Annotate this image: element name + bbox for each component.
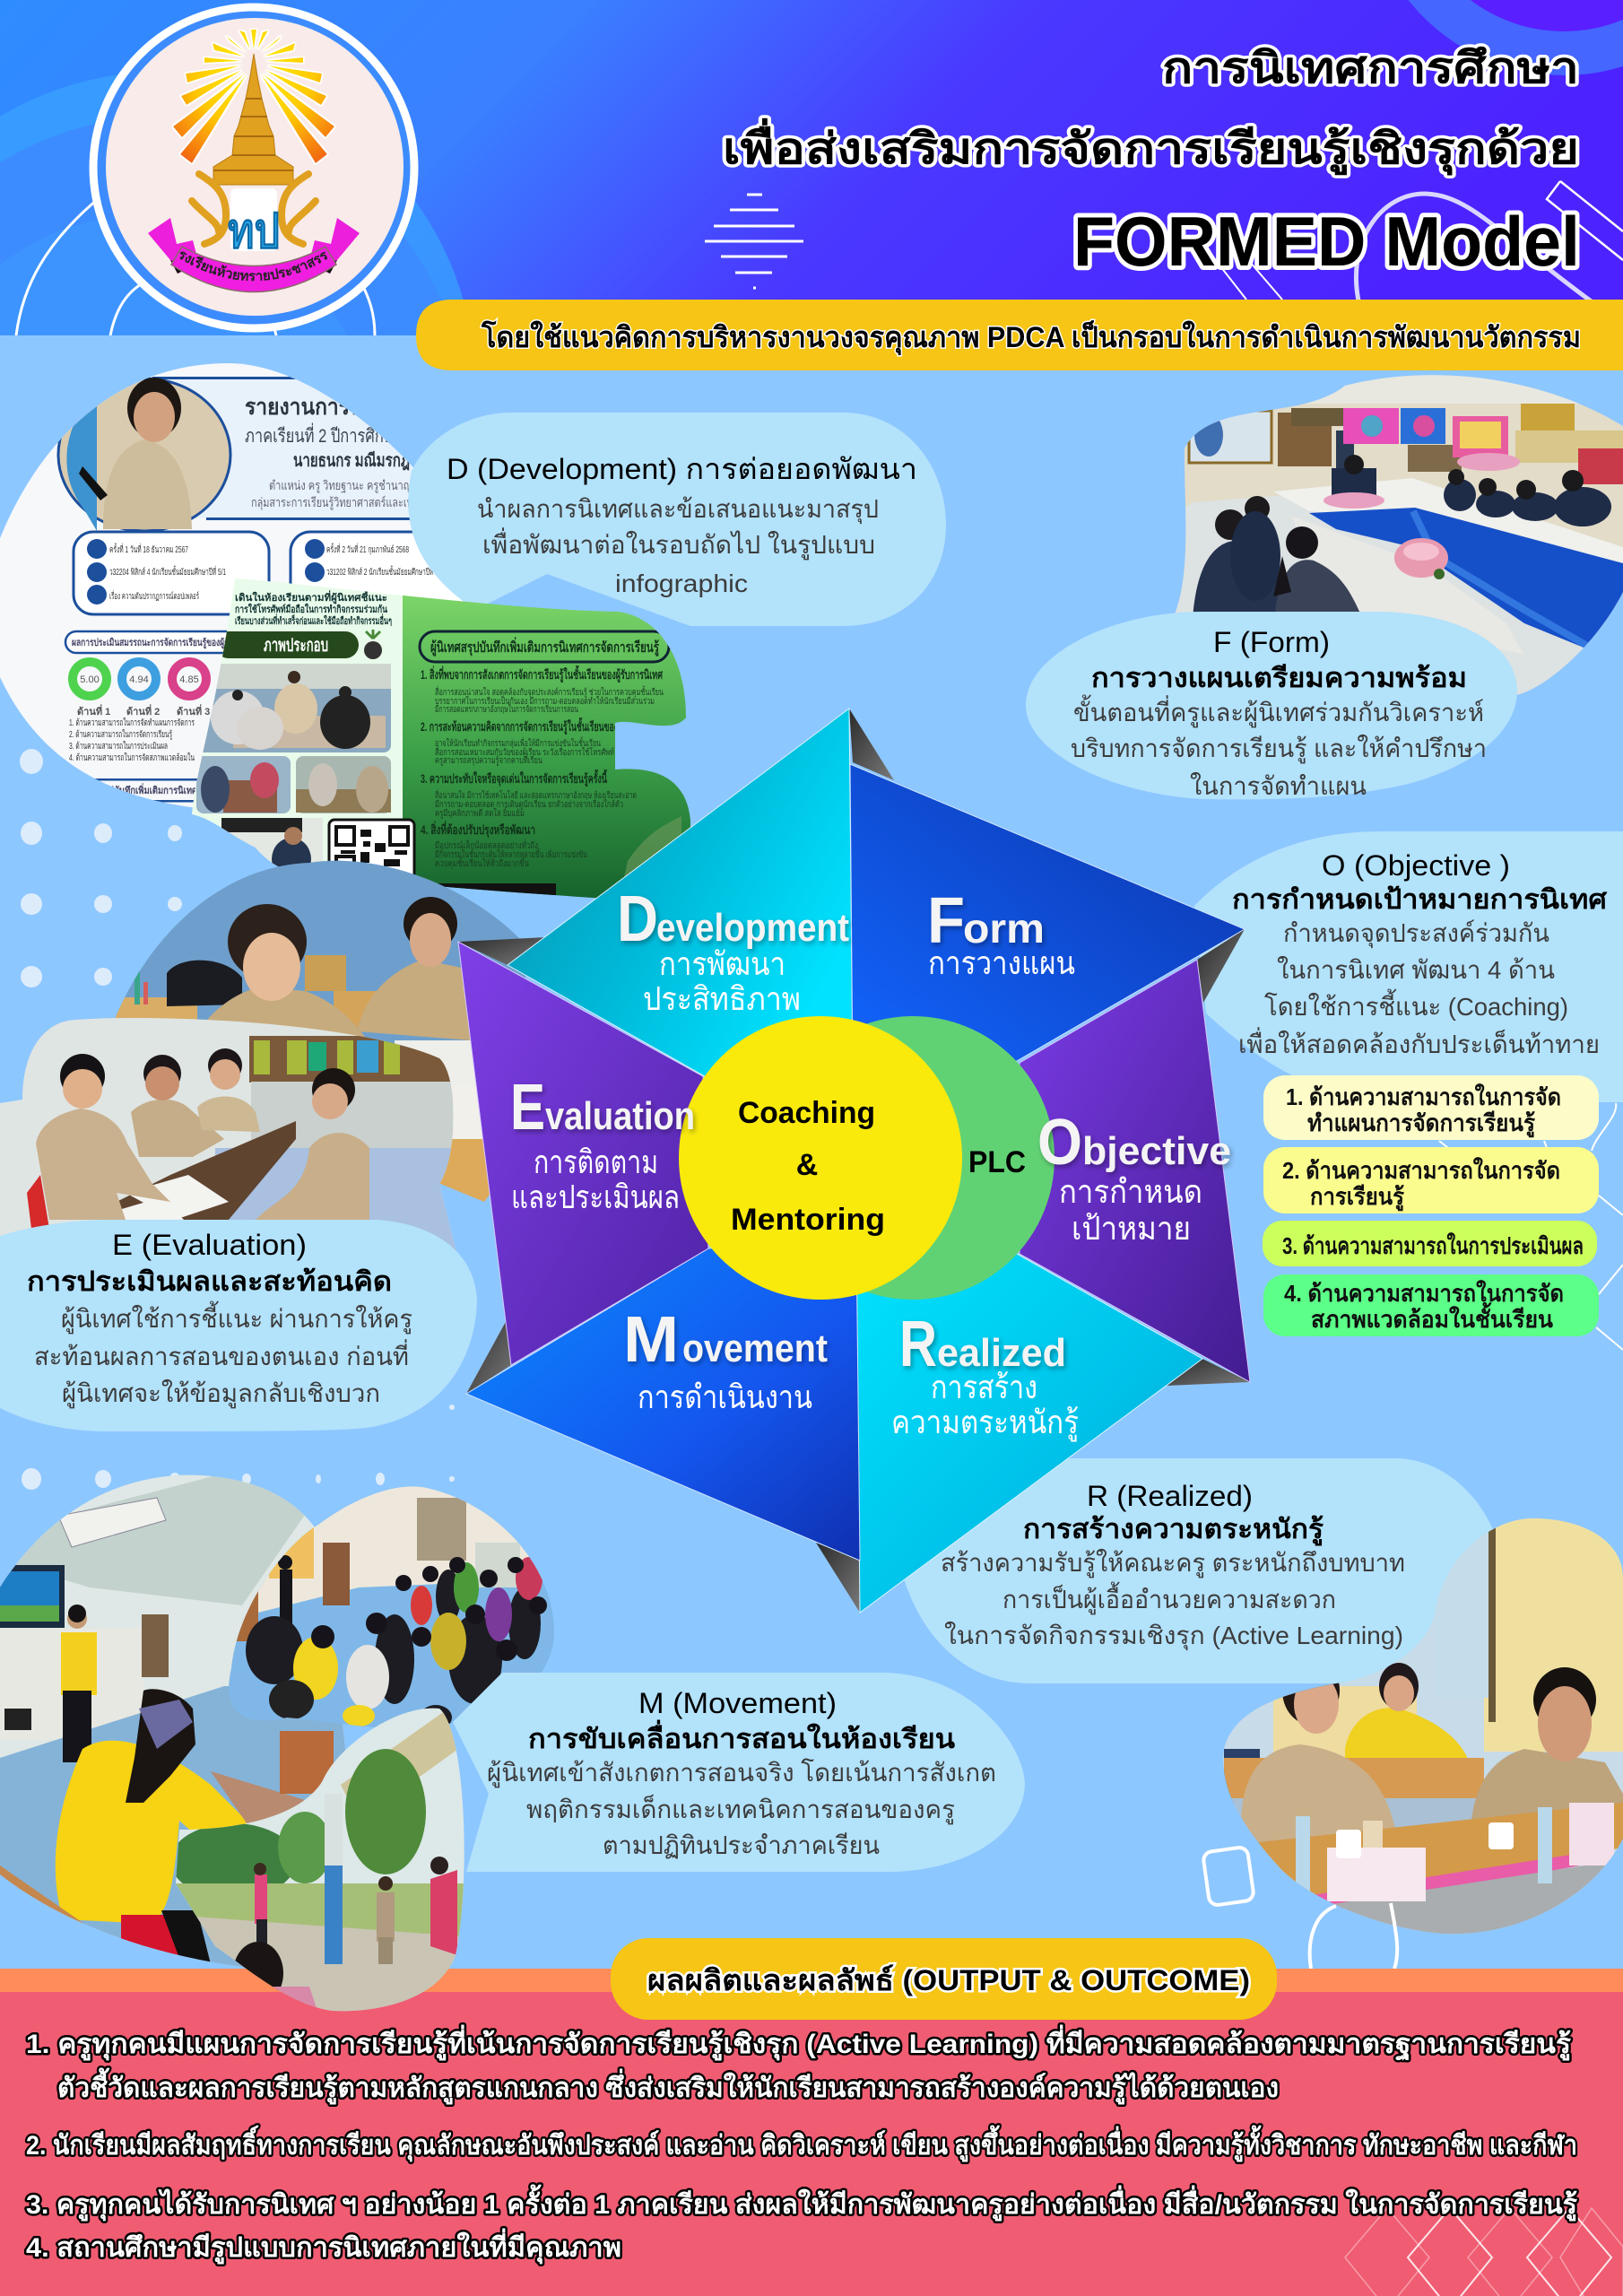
photo bottom overlap (outdoor activity continuation) (170, 1942, 475, 2018)
photo: supervision report document: ครั้งที่ 1 วันที่ 18 ธันวาคม 2567 (109, 543, 188, 555)
photo: supervision form document (green): บรรยากาศในการเรียนเป็นกันเอง มีการถาม-ตอบตลอดทำให้นักเรียนมีส่วนร่วม (435, 694, 655, 707)
label: Form: F (927, 885, 965, 957)
segment: Realized (856, 1238, 1202, 1613)
panel: O Objective: เพื่อให้สอดคล้องกับประเด็นท้าทาย (1238, 1027, 1600, 1058)
label: PLC: PLC (968, 1145, 1026, 1179)
panel: O Objective (1194, 831, 1623, 1102)
label: Form (927, 885, 1075, 981)
photo: supervision form document (green): มีอุปกรณ์เล็กน้อยตลอดอย่างทั่วถึง (435, 839, 538, 851)
photo: supervision report document: ด้านที่ 3 (177, 704, 210, 718)
label: Coaching and Mentoring: Coaching (738, 1096, 875, 1130)
photo: supervision form document (green): มีการถาม-ตอบตลอด การเดินดูนักเรียน ยกตัวอย่างจากเรื่องใกล้ตัว (435, 797, 623, 810)
panel: E Evaluation: ผู้นิเทศจะให้ข้อมูลกลับเชิงบวก (62, 1378, 380, 1409)
panel: D Development (408, 413, 946, 626)
label: Development: การพัฒนา (659, 945, 785, 982)
hexagram diagram: FORMED model (458, 709, 1250, 1613)
panel: R Realized: การสร้างความตระหนักรู้ (1023, 1515, 1324, 1546)
photo: students on floor (229, 1486, 554, 1727)
photo: supervision form document (green): เรียนบางส่วนที่ทำเสร็จก่อนและใช้มือถือทำกิจกรรมอื่นๆ (235, 613, 392, 627)
photo: supervision form document (green): สื่อการสอนน่าสนใจ สอดคล้องกับจุดประสงค์การเรียนรู้ ช่วยในการควบคุมชั้นเรียน (435, 685, 664, 698)
label: Form: การวางแผน (928, 944, 1075, 981)
photo: supervision form document (green): ควบคุมชั้นเรียนให้ทั่วถึงมากขึ้น (435, 857, 529, 869)
panel: O Objective: กำหนดจุดประสงค์ร่วมกัน (1283, 919, 1549, 949)
label: Development: ประสิทธิภาพ (643, 980, 801, 1017)
label: Evaluation: E (510, 1072, 545, 1144)
outcome list: 3. ครูทุกคนได้รับการนิเทศ ฯ อย่างน้อย 1 ครั้งต่อ 1 ภาคเรียน ส่งผลให้มีการพัฒนาครูอย่างต่อเนื่อง มีสื่อ/นวัตกรรม ในการจัดการเรียนรู้ (26, 2184, 1577, 2222)
label: Objective (1037, 1107, 1231, 1247)
photo: supervision report document: ตำแหน่ง ครู วิทยฐานะ ครูชำนาญการ (269, 478, 429, 493)
objective item 1: ทำแผนการจัดการเรียนรู้ (1307, 1109, 1535, 1138)
label: Development (617, 883, 849, 1017)
objective item 4 (1263, 1274, 1599, 1336)
panel: D Development: นำผลการนิเทศและข้อเสนอแนะมาสรุป (477, 495, 879, 525)
photo: supervision form document (green): 4. สิ่งที่ต้องปรับปรุงหรือพัฒนา (421, 821, 535, 838)
photo: supervision report document: ว32204 ฟิสิกส์ 4 นักเรียนชั้นมัธยมศึกษาปีที่ 5/1 (109, 565, 226, 578)
photo: supervision report document: ด้านที่ 2 (126, 704, 160, 718)
panel: F Form: การวางแผนเตรียมความพร้อม (1091, 664, 1467, 693)
segment: Development (508, 709, 853, 1083)
title (723, 45, 1580, 281)
panel: D Development: เพื่อพัฒนาต่อในรอบถัดไป ในรูปแบบ (482, 527, 875, 561)
label: Movement: M (623, 1304, 679, 1376)
subtitle banner (416, 300, 1623, 370)
photo: supervision report document: รายงานการนิเทศ (245, 395, 398, 420)
photo: supervision form document (green): 3. ความประทับใจหรือจุดเด่นในการจัดการเรียนรู้ครั้งนี้ (421, 769, 607, 787)
photo: teachers at desk (evaluation top) (115, 861, 525, 1202)
label: Realized: ealized (937, 1331, 1066, 1375)
panel: M Movement (453, 1673, 1025, 1872)
label: Realized: R (899, 1309, 937, 1380)
decorative dots (20, 749, 455, 1490)
outcome list (26, 2024, 1577, 2265)
photo: supervision form document (green): ครูสามารถสรุปความรู้จากคาบที่เรียน (435, 753, 542, 766)
panel: E Evaluation: การประเมินผลและสะท้อนคิด (27, 1267, 392, 1297)
segment: Evaluation (458, 942, 708, 1365)
photo: supervision report document: เรื่อง ความดันปรากฏการณ์ดอปเพลอร์ (109, 589, 199, 602)
panel: O Objective: ในการนิเทศ พัฒนา 4 ด้าน (1277, 955, 1555, 984)
label: Evaluation (510, 1072, 695, 1215)
label: Evaluation: และประเมินผล (511, 1178, 680, 1215)
title: เพื่อส่งเสริมการจัดการเรียนรู้เชิงรุกด้วย (723, 117, 1579, 176)
output and outcome heading pill (611, 1938, 1277, 2020)
photo: supervision form document (green): ผู้นิเทศสรุปบันทึกเพิ่มเติมการนิเทศการจัดการเรียนรู้ (430, 637, 659, 657)
objective item 4: 4. ด้านความสามารถในการจัด (1284, 1280, 1564, 1307)
panel: E Evaluation: E (Evaluation) (112, 1229, 307, 1261)
panel: R Realized: สร้างความรับรู้ให้คณะครู ตระหนักถึงบทบาท (941, 1548, 1405, 1578)
label: illustration pill (215, 631, 359, 658)
panel: F Form: F (Form) (1213, 626, 1330, 658)
label: Realized: การสร้าง (931, 1369, 1037, 1405)
photo: supervision report document: 1. ด้านความสามารถในการจัดทำแผนการจัดการ (69, 718, 195, 728)
label: Form: orm (963, 905, 1045, 952)
photo: supervision report document: 5.00 (80, 674, 100, 685)
panel: R Realized: การเป็นผู้เอื้ออำนวยความสะดวก (1002, 1581, 1336, 1615)
photo: supervision form document (green): การใช้โทรศัพท์มือถือในการทำกิจกรรมร่วมกัน (235, 603, 387, 615)
segment: Movement (466, 1238, 860, 1561)
outcome list: 1. ครูทุกคนมีแผนการจัดการเรียนรู้ที่เน้นการจัดการเรียนรู้เชิงรุก (Active Learning) ที่มีความสอดคล้องตามมาตรฐานการเรียนรู้ (26, 2024, 1571, 2062)
outcome list: 4. สถานศึกษามีรูปแบบการนิเทศภายในที่มีคุณภาพ (26, 2228, 621, 2265)
photo: supervision form document (green): สื่อการสอนเหมาะสมกับวัยของผู้เรียน ระวังเรื่องการใช้โทรศัพท์ (435, 745, 614, 758)
photo: supervision report document: 4.94 (129, 674, 149, 685)
photo: supervision report document: 4.85 (179, 674, 199, 685)
output and outcome heading pill: ผลผลิตและผลลัพธ์ (OUTPUT & OUTCOME) (647, 1964, 1250, 1996)
photo: supervision form document (green): มีกิจกรรมในชั้นกระตุ้นให้หลากหลายขึ้น เพิ่มการแข่งขัน (435, 848, 587, 860)
label: Coaching and Mentoring: Mentoring (731, 1203, 885, 1237)
decorative rounded outlines (1202, 1847, 1397, 1969)
icon: stacked line diamond (705, 195, 803, 288)
photo: supervision report document: ผลการประเมินสมรรถนะการจัดการเรียนรู้ของผู้รับ (72, 637, 233, 649)
title: การนิเทศการศึกษา (1162, 45, 1579, 92)
objective item 2: การเรียนรู้ (1310, 1183, 1404, 1212)
photo: supervision report document: 2. ด้านความสามารถในการจัดการเรียนรู้ (69, 729, 172, 740)
label: Objective: O (1037, 1107, 1082, 1178)
label: Coaching and Mentoring (731, 1096, 885, 1237)
objective item 2: 2. ด้านความสามารถในการจัด (1282, 1157, 1560, 1184)
logo: school emblem (90, 4, 418, 332)
photo: four teachers (evaluation) (0, 1018, 456, 1251)
label: Coaching and Mentoring: & (796, 1148, 818, 1182)
panel: F Form: ในการจัดทำแผน (1190, 771, 1367, 800)
label: Development: evelopment (656, 906, 849, 950)
decorative white lines right of pills (1439, 1103, 1623, 1350)
panel: D Development: infographic (615, 570, 748, 597)
panel: D Development: D (Development) การต่อยอดพัฒนา (447, 453, 917, 485)
photo: supervision report document: 3. ด้านความสามารถในการประเมินผล (69, 741, 168, 752)
header band (0, 0, 1623, 335)
circle: PLC (771, 1016, 1055, 1300)
photo: review meeting (1211, 1507, 1623, 1946)
panel: M Movement: M (Movement) (638, 1687, 837, 1719)
label: Objective: bjective (1082, 1129, 1231, 1173)
objective item 3 (1263, 1221, 1597, 1266)
photo: supervision form document (green): ครูมีบุคลิกภาพดี สดใส ยิ้มแย้ม (435, 806, 525, 819)
label: Objective: เป้าหมาย (1072, 1210, 1191, 1247)
photo: supervision report document: ด้านที่ 1 (77, 704, 110, 718)
panel: F Form: บริบทการจัดการเรียนรู้ และให้คำปรึกษา (1071, 734, 1487, 764)
label: Development: D (617, 883, 658, 955)
photo: supervision form document (green): เดินในห้องเรียนตามที่ผู้นิเทศชี้แนะ (235, 590, 387, 604)
title: FORMED Model (1073, 202, 1580, 281)
label: illustration pill: ภาพประกอบ (264, 636, 328, 656)
photo: supervision report document: ว31202 ฟิสิกส์ 2 นักเรียนชั้นมัธยมศึกษาปีที่ 4/1 (326, 565, 443, 578)
label: Realized: ความตระหนักรู้ (891, 1404, 1079, 1442)
objective item 1: 1. ด้านความสามารถในการจัด (1286, 1083, 1561, 1110)
objective item 4: สภาพแวดล้อมในชั้นเรียน (1311, 1301, 1553, 1333)
label: Movement: ovement (682, 1326, 828, 1370)
objective item 1 (1263, 1075, 1599, 1140)
photo: outdoor activity (176, 1708, 464, 1969)
label: Movement: การดำเนินงาน (638, 1378, 812, 1415)
photo: supervision report document (0, 363, 464, 807)
photo: supervision report document: ภาคเรียนที่ 2 ปีการศึกษา (245, 422, 402, 447)
photo: supervision report document: 4. ด้านความสามารถในการจัดสภาพแวดล้อมใน (69, 752, 195, 763)
logo monogram: ทป (228, 204, 280, 258)
label: Evaluation: การติดตาม (534, 1144, 658, 1180)
objective item 2 (1263, 1147, 1599, 1213)
circle: Coaching and Mentoring (679, 1016, 962, 1300)
subtitle banner: โดยใช้แนวคิดการบริหารงานวงจรคุณภาพ PDCA เป็นกรอบในการดำเนินการพัฒนานวัตกรรม (481, 319, 1581, 356)
panel: R Realized: R (Realized) (1087, 1480, 1253, 1512)
segment: Objective (1020, 960, 1250, 1382)
panel: R Realized: ในการจัดกิจกรรมเชิงรุก (Active Learning) (944, 1621, 1403, 1651)
panel: R Realized (896, 1458, 1504, 1683)
decorative diamond lattice (1345, 2208, 1623, 2296)
label: Objective: การกำหนด (1059, 1173, 1202, 1210)
panel: O Objective: การกำหนดเป้าหมายการนิเทศ (1232, 885, 1608, 915)
panel: M Movement: ตามปฏิทินประจำภาคเรียน (603, 1831, 880, 1859)
label: Realized (891, 1309, 1079, 1442)
photo: supervision form document (green): สื่อน่าสนใจ มีการใช้เทคโนโลยี และสอดแทรกภาษาอังกฤษ ห้องเรียนสะอาด (435, 788, 637, 801)
panel: E Evaluation (0, 1220, 477, 1431)
panel: F Form: ขั้นตอนที่ครูและผู้นิเทศร่วมกันวิเคราะห์ (1073, 694, 1484, 728)
panel: F Form (1026, 612, 1517, 800)
panel: E Evaluation: ผู้นิเทศใช้การชี้แนะ ผ่านการให้ครู (61, 1300, 412, 1335)
segment: Form (850, 764, 1245, 1076)
photo: supervision form document (green) (179, 574, 699, 906)
photo: supervision report document: นายธนกร มณีมรกฎ (293, 450, 410, 471)
panel: M Movement: การขับเคลื่อนการสอนในห้องเรียน (528, 1719, 956, 1754)
panel: M Movement: พฤติกรรมเด็กและเทคนิคการสอนของครู (526, 1794, 955, 1825)
photo: supervision form document (green): 2. การสะท้อนความคิดจากการจัดการเรียนรู้ในชั้นเรียนของ (421, 717, 618, 735)
photo: supervision form document (green): อาจให้นักเรียนทำกิจกรรมกลุ่มเพื่อให้มีการแข่งขันในชั้นเรียน (435, 736, 601, 749)
panel: O Objective: O (Objective ) (1322, 849, 1510, 882)
photo: supervision report document: สรุปบันทึกเพิ่มเติมการนิเทศ (99, 783, 198, 797)
panel: M Movement: ผู้นิเทศเข้าสังเกตการสอนจริง โดยเน้นการสังเกต (487, 1758, 996, 1788)
bottom bands (0, 1969, 1623, 2296)
photo: classroom teacher and yellow shirt (0, 1474, 346, 1968)
panel: O Objective: โดยใช้การชี้แนะ (Coaching) (1264, 988, 1568, 1021)
segment shadows (458, 709, 1250, 1613)
photo: supervision report document: กลุ่มสาระการเรียนรู้วิทยาศาสตร์และเทคโนโลยี (251, 495, 448, 510)
photo: supervision report document: ครั้งที่ 2 วันที่ 21 กุมภาพันธ์ 2568 (326, 543, 409, 555)
photo: supervision form document (green): 1. สิ่งที่พบจากการสังเกตการจัดการเรียนรู้ในชั้นเรียนของผู้รับการนิเทศ (421, 665, 664, 683)
label: Evaluation: valuation (545, 1094, 695, 1138)
panel: E Evaluation: สะท้อนผลการสอนของตนเอง ก่อนที่ (34, 1339, 409, 1370)
outcome list: ตัวชี้วัดและผลการเรียนรู้ตามหลักสูตรแกนกลาง ซึ่งส่งเสริมให้นักเรียนสามารถสร้างองค์ความรู้ได้ด้วยตนเอง (57, 2067, 1279, 2105)
photo: supervision form document (green): มีการสอดแทรกภาษาอังกฤษในการจัดการเรียนการสอน (435, 704, 578, 715)
photo: planning meeting (1175, 375, 1623, 695)
label: Movement (623, 1304, 828, 1415)
